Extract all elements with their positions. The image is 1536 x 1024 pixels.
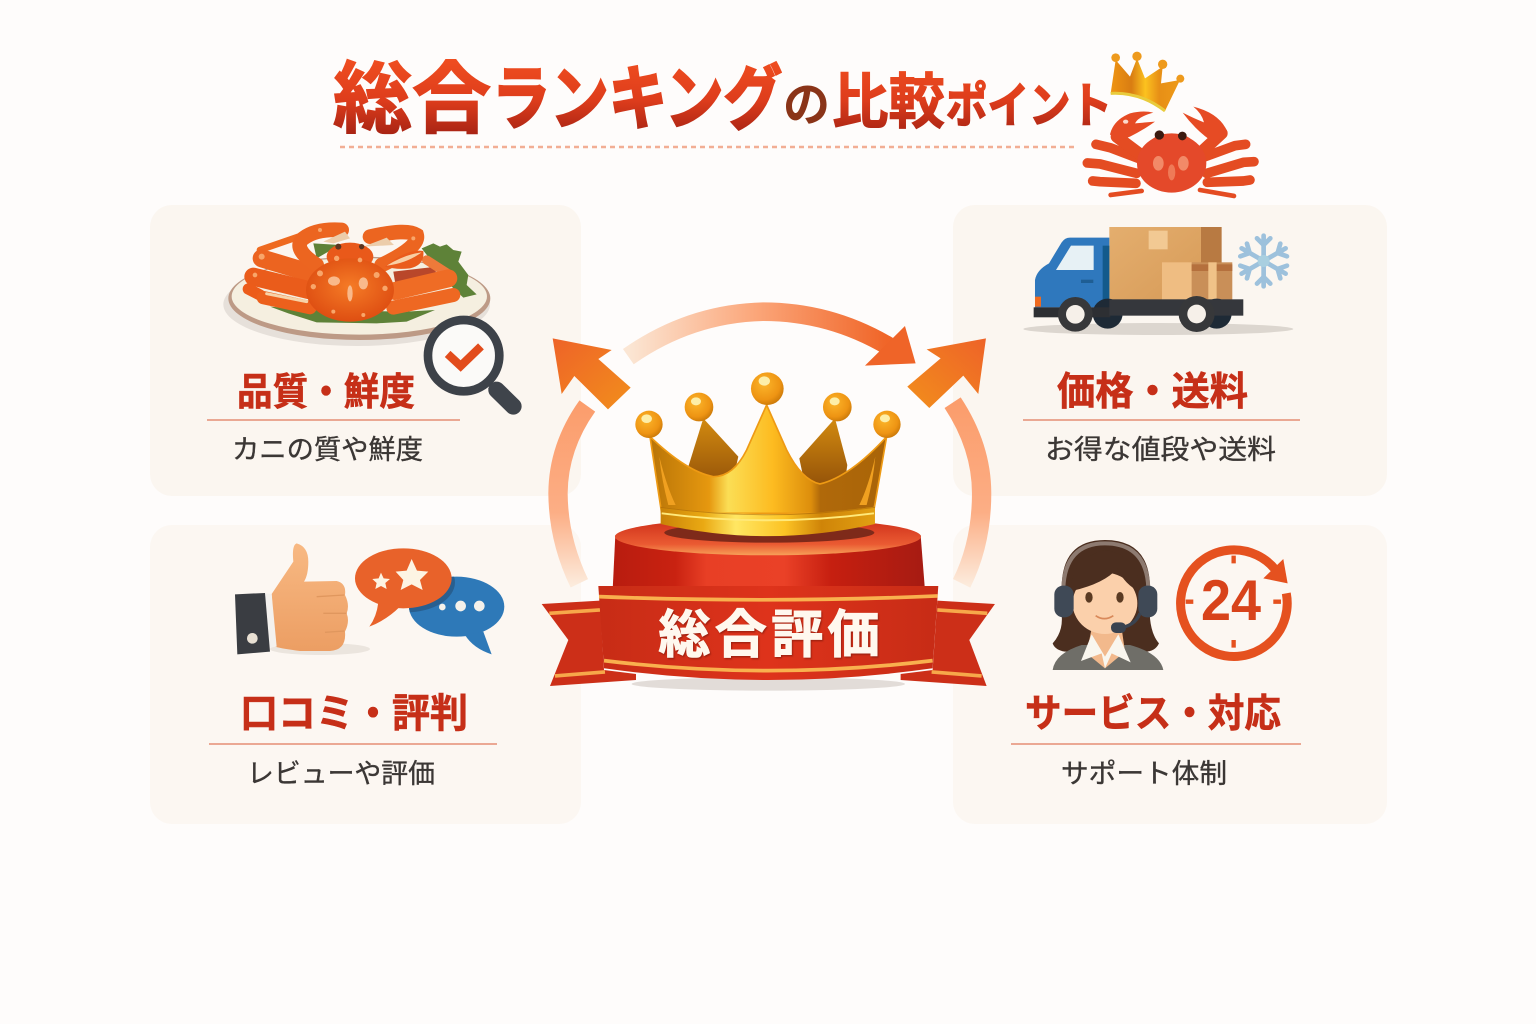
- heading: サービス・対応: サービス・対応: [1025, 693, 1281, 736]
- icon: crab on a plate: [223, 228, 490, 346]
- centre emblem: arrows, crown and ribbon: [542, 312, 995, 691]
- title: ポイント: [946, 80, 1112, 133]
- arrow: right arc: [953, 403, 982, 583]
- ribbon banner: [542, 586, 995, 691]
- text: カニの質や鮮度: カニの質や鮮度: [232, 435, 423, 465]
- icon: small crown on crab: [1111, 52, 1184, 111]
- arrow: left arc: [558, 406, 587, 583]
- text: 総合評価: 総合評価: [658, 607, 880, 665]
- text: お得な値段や送料: お得な値段や送料: [1045, 435, 1276, 465]
- panel content: 価格・送料: [1023, 227, 1300, 465]
- title dashed underline: [340, 146, 1075, 148]
- panel: サービス・対応 card: [953, 525, 1387, 824]
- panel: 口コミ・評判 card: [150, 525, 581, 824]
- title: の: [783, 79, 830, 132]
- icon: thumbs up: [235, 543, 370, 655]
- arrow: left up arrow: [553, 338, 631, 409]
- text: レビューや評価: レビューや評価: [247, 759, 435, 789]
- text: サポート体制: サポート体制: [1061, 759, 1227, 789]
- icon: 24 hour clock: 24: [1201, 569, 1261, 633]
- arrow: top arc: [628, 312, 916, 366]
- title: [333, 55, 1112, 143]
- heading: 口コミ・評判: 口コミ・評判: [240, 692, 468, 736]
- panel content: 品質・鮮度: [207, 228, 513, 465]
- icon: magnifying glass with check: [428, 320, 513, 406]
- panel content: 口コミ・評判: [209, 543, 504, 789]
- title: 総合: [333, 55, 491, 143]
- panel: 価格・送料 card: [953, 205, 1387, 496]
- arrow: right up arrow: [907, 338, 986, 408]
- pedestal: [613, 518, 925, 590]
- heading: 品質・鮮度: 品質・鮮度: [237, 372, 415, 414]
- icon: 24 hour clock: [1181, 550, 1288, 657]
- icon: delivery truck with snowflake: [1023, 227, 1293, 335]
- icon: red crab: [1087, 107, 1254, 196]
- panel content: サービス・対応: [1011, 540, 1301, 789]
- panel: 品質・鮮度 card: [150, 205, 581, 496]
- icon: gold crown: [635, 372, 901, 536]
- title: 比較: [832, 69, 945, 136]
- heading: 価格・送料: 価格・送料: [1057, 371, 1248, 414]
- icon: support agent with headset: [1053, 540, 1163, 670]
- icon: speech bubbles: [355, 548, 504, 654]
- title: ランキング: [492, 60, 782, 138]
